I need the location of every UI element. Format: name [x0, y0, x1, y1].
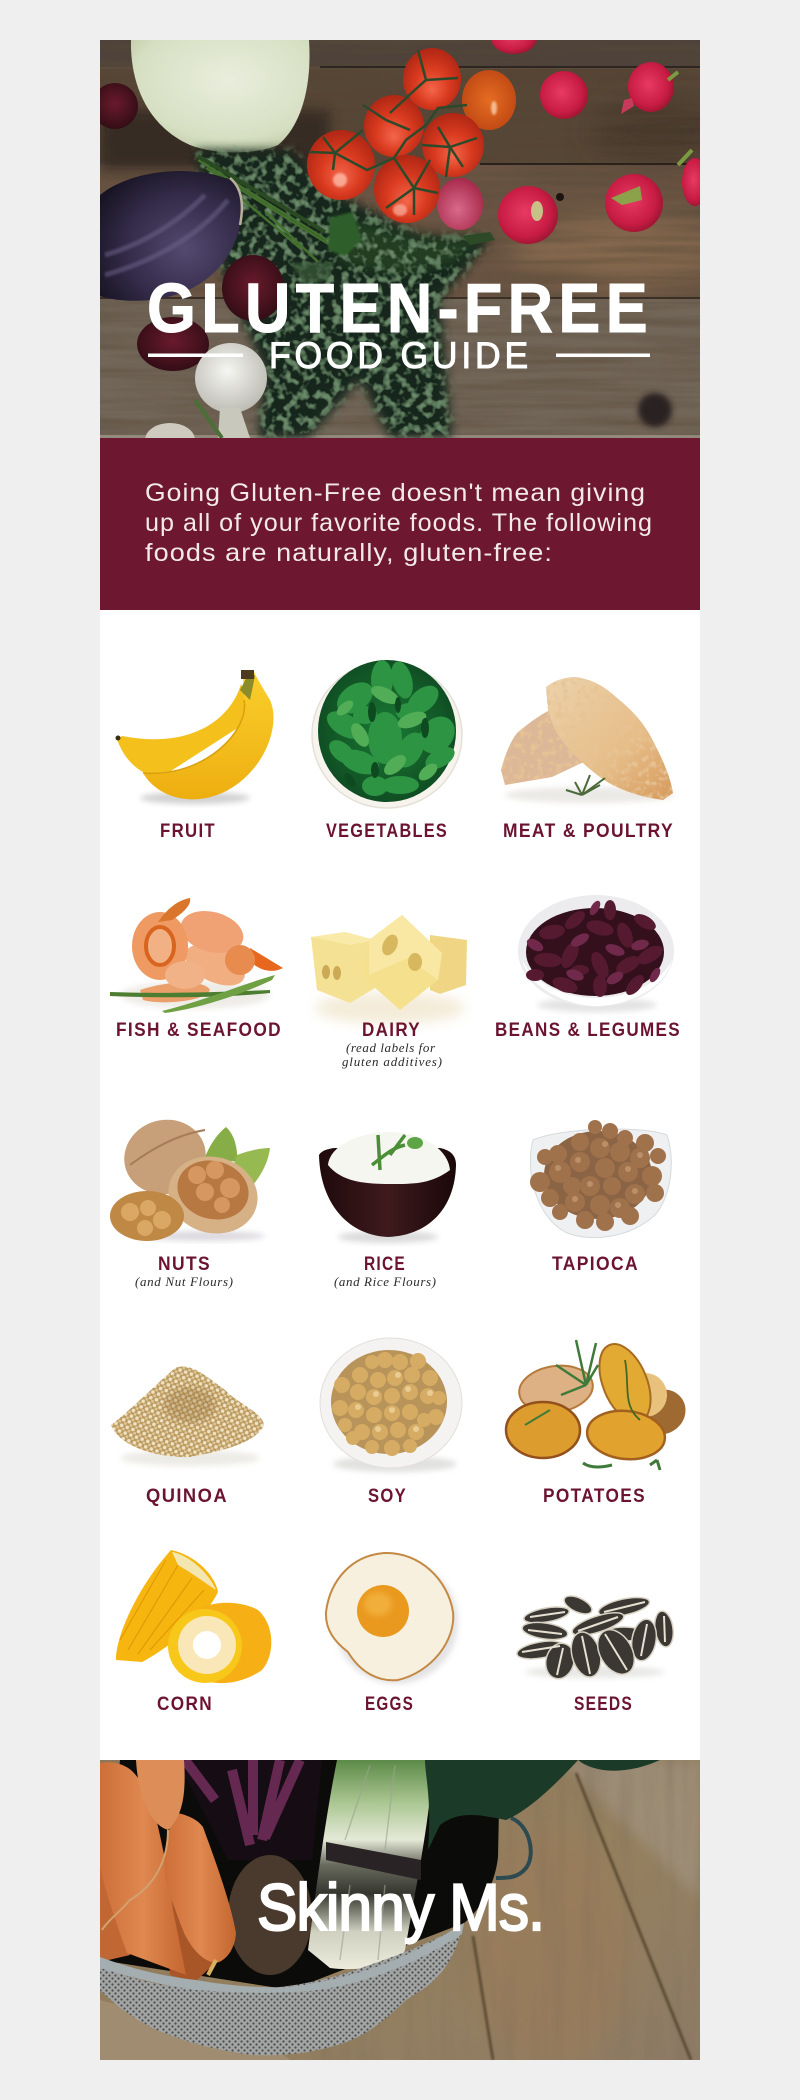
metal colander — [100, 1923, 464, 2055]
panel: footer photo with logo — [100, 1760, 700, 2070]
icon: walnuts and leaves — [110, 1111, 270, 1243]
item: nuts — [110, 1111, 270, 1289]
bowl handle — [496, 1818, 531, 1878]
item: beans and legumes — [495, 895, 681, 1041]
red onions — [137, 255, 284, 371]
vine stems — [309, 50, 477, 215]
label: dairy: DAIRY — [362, 1020, 421, 1041]
note: nut flours: (and Nut Flours) — [135, 1274, 233, 1289]
label: seeds: SEEDS — [574, 1694, 633, 1715]
label: fruit: FRUIT — [160, 821, 216, 842]
logo: Skinny Ms.: Skinny Ms. — [257, 1870, 544, 1944]
icon: roasted potatoes — [506, 1337, 694, 1470]
item: seeds — [516, 1592, 675, 1715]
label: quinoa: QUINOA — [146, 1486, 228, 1507]
tomatoes on the vine — [307, 48, 516, 223]
panel: intro band — [100, 438, 700, 610]
label: meat and poultry: MEAT & POULTRY — [503, 821, 674, 842]
item: potatoes — [506, 1337, 694, 1507]
dark bowl interior — [100, 1760, 500, 1990]
item: quinoa — [111, 1367, 264, 1507]
infographic page — [100, 40, 700, 2060]
icon: corn cobs — [116, 1550, 271, 1683]
label: beans and legumes: BEANS & LEGUMES — [495, 1020, 681, 1041]
icon: grilled chicken breasts — [501, 677, 675, 803]
herbs: dark green mass — [195, 150, 495, 438]
item: soy — [320, 1338, 462, 1507]
icon: shrimp — [110, 898, 283, 1013]
icon: quinoa pile — [111, 1367, 264, 1466]
item: meat and poultry — [501, 677, 675, 842]
green cabbage — [131, 40, 310, 152]
item: corn — [116, 1550, 271, 1715]
wood table — [100, 1760, 700, 2070]
label: soy: SOY — [368, 1486, 407, 1507]
red onion top left — [100, 83, 138, 129]
note: rice flours: (and Rice Flours) — [334, 1274, 436, 1289]
item: vegetables — [312, 659, 462, 842]
icon: rice bowl — [319, 1132, 456, 1243]
intro text — [145, 479, 653, 567]
icon: sunflower seeds — [516, 1592, 675, 1682]
note: read labels — [342, 1040, 442, 1069]
title: GLUTEN-FREE: GLUTEN-FREE — [147, 269, 653, 347]
note: read labels: gluten additives) — [342, 1054, 442, 1069]
carrots — [100, 1760, 236, 1982]
subtitle rule right — [556, 354, 650, 357]
intro text: foods are naturally, gluten-free: — [145, 539, 553, 567]
note: read labels: (read labels for — [346, 1040, 436, 1055]
beet root — [228, 1855, 312, 1975]
label: vegetables: VEGETABLES — [326, 821, 448, 842]
radishes — [437, 40, 700, 244]
item: fruit — [116, 670, 273, 842]
item: fish and seafood — [110, 898, 283, 1041]
icon: bowl of greens — [312, 659, 462, 808]
item: tapioca — [530, 1120, 671, 1275]
label: fish and seafood: FISH & SEAFOOD — [116, 1020, 282, 1041]
chard stems — [308, 1760, 433, 1969]
icon: fried egg — [326, 1553, 458, 1684]
white onion and garlic — [145, 343, 267, 438]
panel: food grid — [100, 610, 700, 1761]
leaves — [425, 1760, 660, 1850]
icon: cheese cubes — [311, 915, 467, 1024]
label: potatoes: POTATOES — [543, 1486, 646, 1507]
beet stems — [177, 1760, 322, 1860]
label: nuts: NUTS — [158, 1254, 211, 1275]
subtitle rule left — [148, 354, 243, 357]
label: rice: RICE — [364, 1254, 406, 1275]
purple cabbage — [100, 171, 242, 301]
label: tapioca: TAPIOCA — [552, 1254, 639, 1275]
intro text: up all of your favorite foods. The following — [145, 509, 653, 537]
item: dairy — [311, 915, 467, 1069]
panel: hero photo with title — [100, 40, 700, 438]
icon: soybean bowl — [320, 1338, 462, 1472]
wood table background — [100, 40, 730, 438]
label: eggs: EGGS — [365, 1694, 414, 1715]
item: eggs — [326, 1553, 458, 1715]
intro text: Going Gluten-Free doesn't mean giving — [145, 479, 646, 507]
subtitle: FOOD GUIDE: FOOD GUIDE — [269, 335, 532, 376]
icon: banana — [116, 670, 273, 804]
icon: bowl of kidney beans — [518, 895, 674, 1012]
item: rice — [319, 1132, 456, 1289]
icon: tapioca bowl — [530, 1120, 671, 1238]
label: corn: CORN — [157, 1694, 213, 1715]
